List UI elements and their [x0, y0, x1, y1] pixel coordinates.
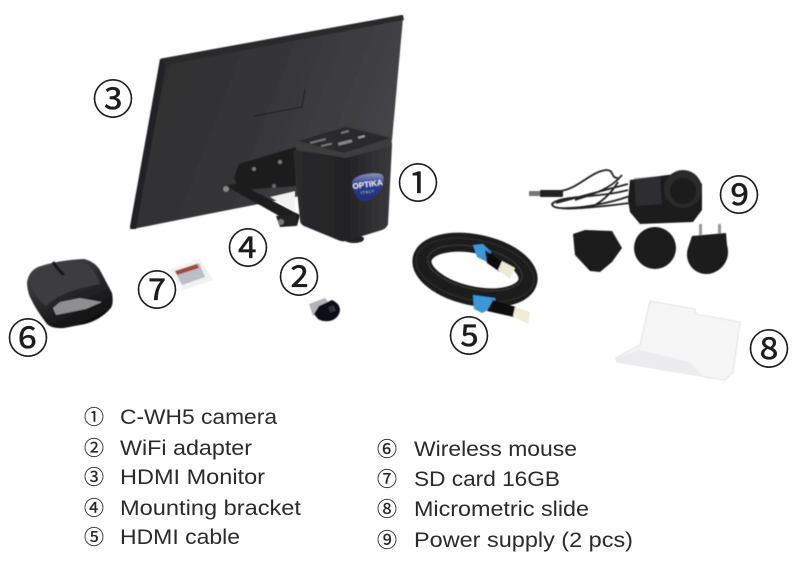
icon: power supply with plug adapters — [529, 170, 728, 274]
legend item 3: ③ — [84, 466, 104, 489]
legend item 8: ⑧ — [377, 498, 397, 521]
legend item 2: ② — [84, 437, 104, 460]
callout: 7: ⑦ — [136, 268, 178, 314]
legend item 9: Power supply (2 pcs) — [414, 528, 633, 552]
icon: wireless mouse — [27, 259, 113, 328]
callout: 4: ④ — [228, 226, 268, 272]
legend item 4: ④ — [84, 497, 104, 520]
legend item 5: ⑤ — [84, 526, 104, 549]
legend: right column — [377, 437, 633, 552]
icon: mounting bracket — [223, 147, 300, 227]
icon: HDMI monitor — [130, 15, 404, 229]
legend: left column — [84, 405, 301, 549]
icon: Optika logo — [352, 173, 384, 202]
callout: 9: ⑨ — [718, 173, 760, 219]
legend item 7: SD card 16GB — [414, 467, 560, 491]
legend item 5: HDMI cable — [120, 525, 240, 549]
legend item 3: HDMI Monitor — [120, 465, 265, 489]
legend item 1: ① — [84, 406, 104, 429]
icon: power cable — [552, 170, 630, 209]
icon: C-WH5 camera — [293, 126, 392, 243]
callout: 3: ③ — [92, 77, 134, 123]
callout: 5: ⑤ — [448, 314, 490, 360]
legend item 7: ⑦ — [377, 468, 397, 491]
label: circled numbers on the photo — [8, 77, 790, 373]
icon: SD card — [168, 259, 213, 290]
icon: HDMI cable — [410, 228, 540, 324]
legend item 1: C-WH5 camera — [120, 405, 277, 429]
icon: Optika logo: ITALY — [361, 189, 375, 195]
legend item 6: ⑥ — [377, 438, 397, 461]
legend item 2: WiFi adapter — [120, 436, 252, 460]
callout: 2: ② — [278, 255, 320, 301]
icon: UK plug — [573, 230, 622, 272]
callout: 8: ⑧ — [748, 327, 790, 373]
icon: Optika logo: OPTIKA — [352, 178, 383, 191]
icon: WiFi adapter — [309, 298, 340, 321]
legend item 8: Micrometric slide — [414, 497, 589, 521]
icon: barrel plug — [529, 190, 563, 197]
callout: 1: ① — [398, 161, 438, 207]
legend item 4: Mounting bracket — [120, 496, 301, 520]
icon: micrometric slide box — [616, 301, 740, 380]
icon: adapter body — [628, 170, 702, 224]
icon: US plug — [634, 227, 676, 269]
icon: EU plug — [687, 224, 728, 274]
legend item 9: ⑨ — [377, 529, 397, 552]
callout: 6: ⑥ — [8, 316, 48, 362]
legend item 6: Wireless mouse — [414, 437, 577, 461]
